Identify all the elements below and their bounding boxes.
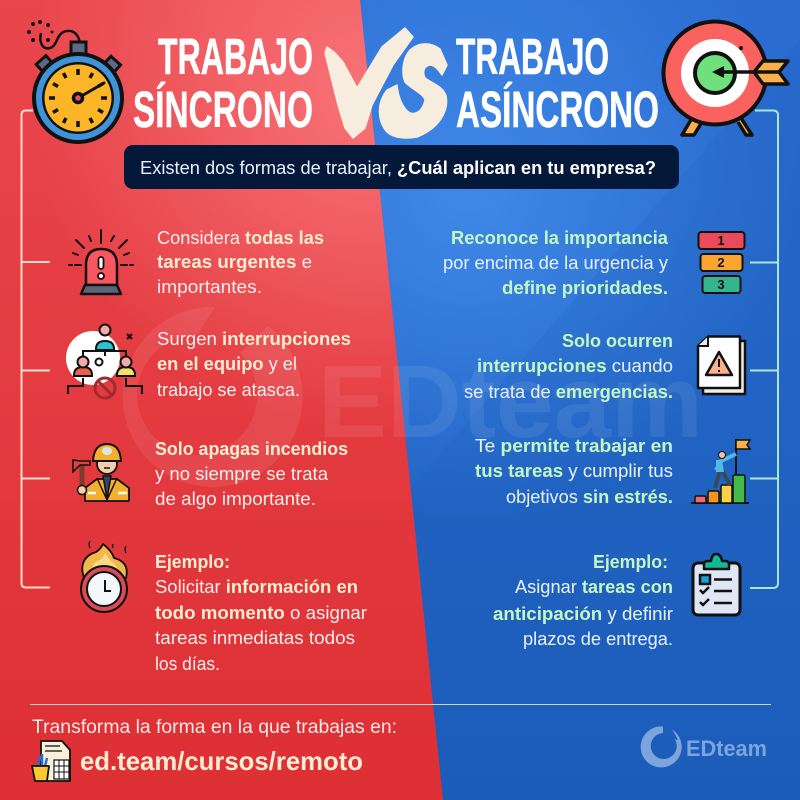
text: reconoce: define prioridades. <box>502 277 668 298</box>
text: solo ocurren: se trata de emergencias. <box>464 381 673 402</box>
text: solo ocurren <box>464 330 673 402</box>
text: permite trabajar: Te permite trabajar en <box>475 435 673 456</box>
left connector line <box>22 110 50 588</box>
watermark: EDteam <box>123 307 703 487</box>
icon: clock on fire <box>81 541 127 612</box>
text: ejemplo derecha: plazos de entrega. <box>523 628 673 649</box>
text: reconoce <box>443 227 669 298</box>
logo: EDteam <box>641 726 767 767</box>
footer text: transforma: Transforma la forma en la que trabajas en: <box>32 716 397 738</box>
text: ejemplo derecha: Ejemplo: <box>593 551 668 572</box>
text: permite trabajar: objetivos sin estrés. <box>506 486 673 507</box>
text: considera: Considera todas las <box>157 227 324 248</box>
text: ejemplo izquierda: Ejemplo: <box>155 551 230 572</box>
title: Trabajo Asíncrono <box>456 28 659 138</box>
icon: team interruption <box>66 324 142 398</box>
text: interrupciones <box>157 328 351 400</box>
text: ejemplo izquierda <box>155 551 367 674</box>
footer link: ed.team/cursos/remoto <box>80 746 363 776</box>
text: reconoce: Reconoce la importancia <box>451 227 669 248</box>
text: apagas incendios: de algo importante. <box>155 488 316 509</box>
title: Trabajo Síncrono: TRABAJO <box>158 28 313 85</box>
title: Trabajo Síncrono <box>133 28 313 138</box>
text: apagas incendios: Solo apagas incendios <box>155 438 348 459</box>
text: ejemplo derecha <box>493 551 673 649</box>
text: interrupciones: en el equipo y el <box>157 353 297 374</box>
text: ejemplo izquierda: Solicitar información en <box>155 576 358 597</box>
text: considera <box>157 227 324 297</box>
text: permite trabajar: tus tareas y cumplir tus <box>475 460 673 481</box>
text: considera: importantes. <box>157 276 262 297</box>
text: ejemplo derecha: Asignar tareas con <box>515 576 673 597</box>
icon: climbing to flag <box>691 439 750 503</box>
text: apagas incendios <box>155 438 348 509</box>
text: interrupciones: trabajo se atasca. <box>157 379 300 400</box>
text: solo ocurren: Solo ocurren <box>562 330 673 351</box>
title: Trabajo Asíncrono: TRABAJO <box>456 28 609 85</box>
icon: alarm light <box>69 230 133 294</box>
icon: target with arrow <box>664 22 788 135</box>
right connector line <box>750 110 778 588</box>
icon: firefighter <box>73 444 129 501</box>
text: solo ocurren: interrupciones cuando <box>477 355 673 376</box>
banner question <box>124 145 679 189</box>
text: permite trabajar <box>475 435 673 507</box>
title: Trabajo Asíncrono: ASÍNCRONO <box>456 81 659 138</box>
icon: warning document <box>698 336 745 394</box>
text: considera: tareas urgentes e <box>157 251 312 272</box>
icon: priority list: 1 <box>717 233 725 248</box>
icon: priority list: 2 <box>717 255 725 270</box>
text: ejemplo izquierda: tareas inmediatas todos <box>155 627 355 648</box>
text: apagas incendios: y no siempre se trata <box>155 463 329 484</box>
banner question: Existen dos formas de trabajar, ¿Cuál aplican en tu empresa? <box>140 157 656 178</box>
icon: clipboard checklist <box>693 554 740 615</box>
icon: spreadsheet and pencils <box>32 741 70 781</box>
icon: priority list: 3 <box>717 277 725 292</box>
text: ejemplo izquierda: los días. <box>155 653 220 674</box>
background: red side <box>0 0 443 800</box>
icon: stopwatch <box>27 20 124 144</box>
icon: priority list <box>698 232 744 293</box>
text: reconoce: por encima de la urgencia y <box>443 252 669 273</box>
text: interrupciones: Surgen interrupciones <box>157 328 351 349</box>
title: Trabajo Síncrono: SÍNCRONO <box>133 81 313 138</box>
VS brush lettering <box>325 28 447 138</box>
divider <box>30 704 771 706</box>
text: ejemplo derecha: anticipación y definir <box>493 603 673 624</box>
text: ejemplo izquierda: todo momento o asignar <box>155 602 367 623</box>
logo: EDteam: EDteam <box>686 736 767 761</box>
watermark: EDteam: EDteam <box>318 344 703 459</box>
